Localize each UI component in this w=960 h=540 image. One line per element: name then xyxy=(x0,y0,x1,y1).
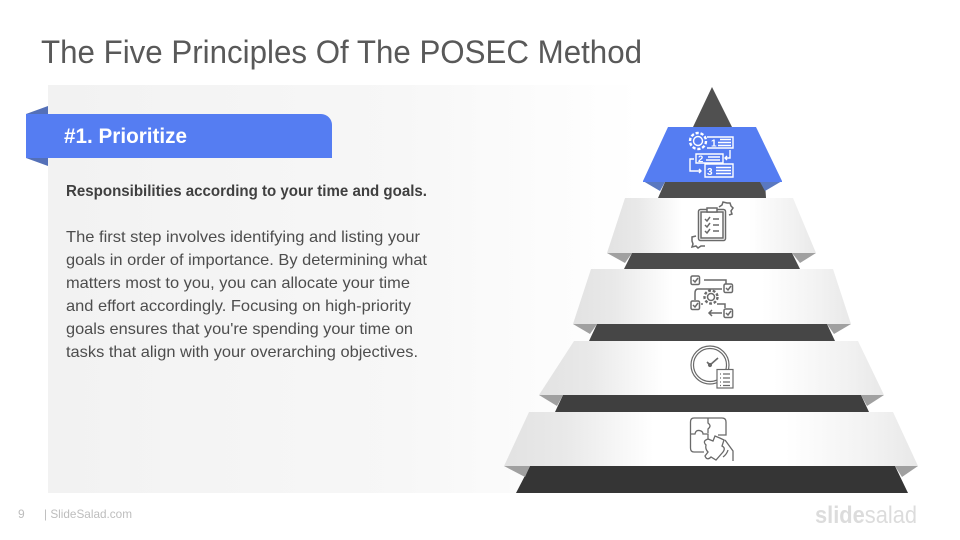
tier 3 band xyxy=(573,269,851,334)
icon: clipboard with gears xyxy=(692,202,733,248)
footer source: | SlideSalad.com xyxy=(44,507,132,521)
ribbon heading xyxy=(26,106,332,166)
icon: clock with document xyxy=(691,346,733,388)
pyramid dark core tiers xyxy=(516,87,908,493)
icon: gear and numbered list: 1 xyxy=(711,138,717,150)
body text: and effort accordingly. Focusing on high-priority xyxy=(66,298,411,315)
icon: puzzle with hand xyxy=(690,418,733,461)
footer page number: 9 xyxy=(18,507,25,521)
body text: tasks that align with your overarching objectives. xyxy=(66,344,418,361)
body text: matters most to you, you can allocate your time xyxy=(66,275,410,292)
body text: goals ensures that you're spending your time on xyxy=(66,321,413,338)
tier 2 band xyxy=(607,198,816,263)
logo wordmark: slidesalad xyxy=(815,502,917,529)
subheading: Responsibilities according to your time and goals. xyxy=(66,183,427,200)
body text: goals in order of importance. By determining what xyxy=(66,252,428,269)
pyramid xyxy=(504,87,918,493)
icon: workflow with gear xyxy=(691,276,732,318)
tier 4 band xyxy=(539,341,884,406)
icon: gear and numbered list: 2 xyxy=(698,154,703,165)
tier 5 band xyxy=(504,412,918,477)
tier 1 band: blue xyxy=(643,127,782,191)
ribbon heading: #1. Prioritize xyxy=(64,125,187,148)
icon: gear and numbered list: 3 xyxy=(707,167,713,178)
body text xyxy=(66,229,428,361)
icon: gear and numbered list xyxy=(690,133,733,178)
panel: text background xyxy=(48,85,640,493)
title: The Five Principles Of The POSEC Method xyxy=(41,34,642,70)
body text: The first step involves identifying and listing your xyxy=(66,229,421,246)
